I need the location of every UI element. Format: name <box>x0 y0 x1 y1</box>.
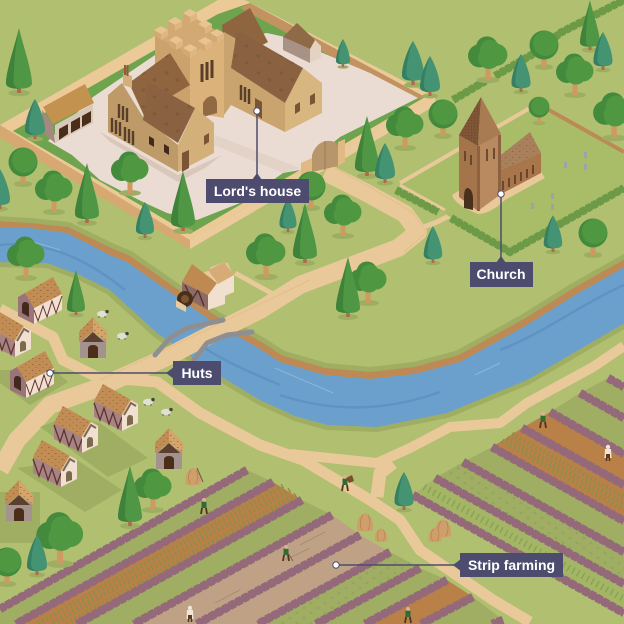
hut <box>33 440 77 487</box>
Lord's enclosure <box>0 0 436 249</box>
hut <box>0 310 31 357</box>
right wing <box>231 30 322 132</box>
hut <box>54 406 98 453</box>
label: Church <box>470 191 533 287</box>
hut <box>79 317 107 358</box>
back shed <box>283 23 321 63</box>
hut plots <box>0 370 148 543</box>
roads <box>0 168 624 622</box>
river <box>0 226 624 427</box>
courtyard <box>48 33 418 220</box>
hut <box>5 480 33 521</box>
outer wall faces <box>0 125 190 249</box>
rear roof <box>222 8 268 65</box>
sheep <box>97 310 173 416</box>
left strip fields <box>0 470 503 624</box>
label: Lord's house <box>206 108 309 203</box>
farm workers <box>186 412 612 623</box>
hut <box>10 351 54 398</box>
water wheel <box>177 291 193 307</box>
gravestones <box>531 152 587 210</box>
hedges <box>413 378 624 613</box>
tower <box>459 135 478 211</box>
yard paths and walls <box>400 108 530 183</box>
hedges <box>0 470 503 624</box>
hut <box>155 428 183 469</box>
watermill <box>176 262 234 312</box>
huts <box>0 277 183 543</box>
left wing <box>108 53 214 172</box>
right strip fields <box>413 378 624 613</box>
Lord's house <box>108 8 322 172</box>
label: Lord's house: Lord's house <box>214 183 301 199</box>
hay stacks <box>185 468 451 542</box>
bridge <box>155 320 252 360</box>
label: Strip farming: Strip farming <box>468 557 555 573</box>
label: Church: Church <box>476 266 526 282</box>
inner grass <box>13 3 425 234</box>
label: Strip farming <box>333 553 563 577</box>
label: Huts: Huts <box>181 365 213 381</box>
label: Huts <box>47 361 221 385</box>
churchyard <box>396 0 624 252</box>
church <box>452 97 545 214</box>
gate <box>301 139 345 180</box>
left shed <box>42 84 94 143</box>
spire <box>459 97 481 146</box>
green hedges <box>396 0 624 252</box>
hut <box>18 277 62 324</box>
hut <box>94 384 138 431</box>
nave <box>501 153 541 194</box>
tower <box>154 9 242 118</box>
